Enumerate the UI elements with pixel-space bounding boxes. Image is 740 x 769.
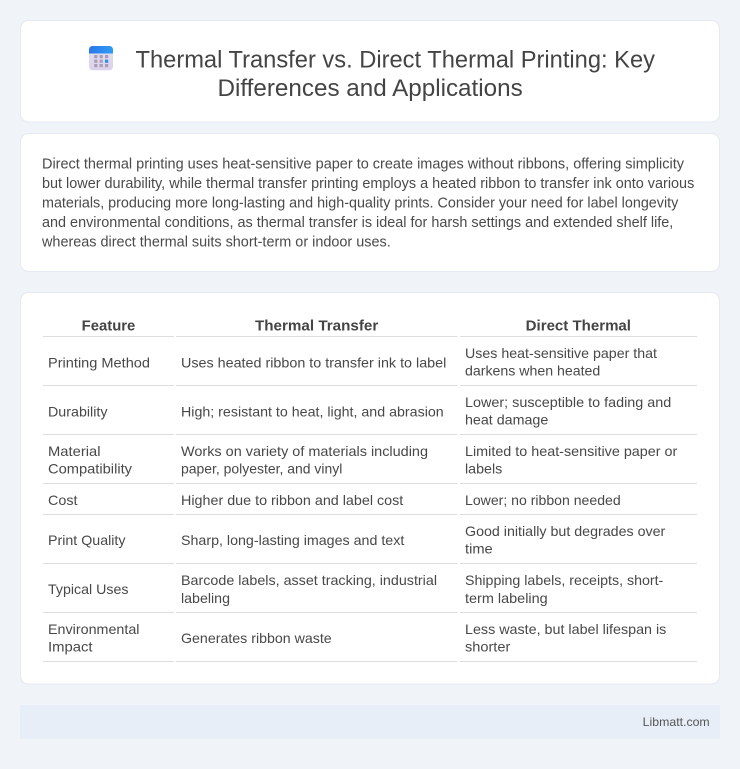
- row: environmental impact: Less waste, but label lifespan is: [465, 621, 666, 637]
- summary text: Direct thermal printing uses heat-sensitive paper to create images without ribbons, offering simplicity: [42, 156, 685, 172]
- row: material compatibility: Material: [48, 443, 100, 459]
- title: Thermal Transfer vs. Direct Thermal Printing: Key: [136, 46, 655, 74]
- row: durability: Durability: [48, 403, 108, 419]
- summary text: and environmental conditions, as thermal transfer is ideal for harsh settings and extended shelf life,: [42, 215, 673, 231]
- row: printing method: Uses heated ribbon to transfer ink to label: [181, 354, 446, 370]
- icon: calendar: [89, 46, 113, 70]
- row: environmental impact: Environmental: [48, 621, 140, 637]
- row: durability: heat damage: [465, 412, 549, 428]
- footer bar: [20, 705, 720, 739]
- row: cost: [48, 492, 621, 508]
- table header row: Thermal Transfer: [255, 319, 379, 335]
- summary text: [41, 156, 694, 250]
- row: material compatibility: paper, polyester, and vinyl: [181, 461, 342, 477]
- row: environmental impact: Impact: [48, 639, 93, 655]
- row: material compatibility: Works on variety of materials including: [181, 443, 428, 459]
- row: durability: High; resistant to heat, light, and abrasion: [181, 403, 444, 419]
- row: durability: [48, 394, 671, 428]
- header panel: [20, 20, 720, 122]
- row: environmental impact: shorter: [465, 639, 511, 655]
- row: material compatibility: Compatibility: [48, 461, 132, 477]
- table header row: [82, 319, 631, 335]
- row: cost: Cost: [48, 492, 78, 508]
- row: print quality: [48, 523, 666, 557]
- title: [136, 46, 655, 102]
- row: printing method: Printing Method: [48, 354, 150, 370]
- row: print quality: Print Quality: [48, 532, 126, 548]
- title: Differences and Applications: [218, 75, 523, 102]
- row: cost: Higher due to ribbon and label cost: [181, 492, 403, 508]
- footer credit: Libmatt.com: [643, 715, 710, 729]
- row: print quality: time: [465, 541, 493, 557]
- summary text: materials, producing more long-lasting and high-quality prints. Consider your need for label longevity: [42, 195, 679, 211]
- row: material compatibility: [48, 443, 678, 477]
- row: typical uses: [48, 572, 664, 606]
- comparison table panel: [20, 292, 720, 684]
- row: printing method: [48, 345, 657, 379]
- table header row: Direct Thermal: [526, 319, 631, 335]
- row: environmental impact: [48, 621, 666, 655]
- row: environmental impact: Generates ribbon waste: [181, 630, 332, 646]
- row: printing method: Uses heat-sensitive paper that: [465, 345, 657, 361]
- table header row: Feature: [82, 319, 135, 335]
- row: print quality: Sharp, long-lasting images and text: [181, 532, 404, 548]
- row: print quality: Good initially but degrades over: [465, 523, 666, 539]
- summary text: but lower durability, while thermal transfer printing employs a heated ribbon to transfer ink onto various: [42, 176, 694, 192]
- row: typical uses: Barcode labels, asset tracking, industrial: [181, 572, 437, 588]
- row: typical uses: Typical Uses: [48, 581, 128, 597]
- row: typical uses: Shipping labels, receipts, short-: [465, 572, 664, 588]
- row: material compatibility: Limited to heat-sensitive paper or: [465, 443, 678, 459]
- row: material compatibility: labels: [465, 461, 502, 477]
- row: typical uses: term labeling: [465, 590, 548, 606]
- row: cost: Lower; no ribbon needed: [465, 492, 621, 508]
- row: durability: Lower; susceptible to fading and: [465, 394, 671, 410]
- summary text: whereas direct thermal suits short-term or indoor uses.: [41, 234, 391, 250]
- row: typical uses: labeling: [181, 590, 230, 606]
- summary panel: [20, 134, 720, 272]
- row: printing method: darkens when heated: [465, 363, 600, 379]
